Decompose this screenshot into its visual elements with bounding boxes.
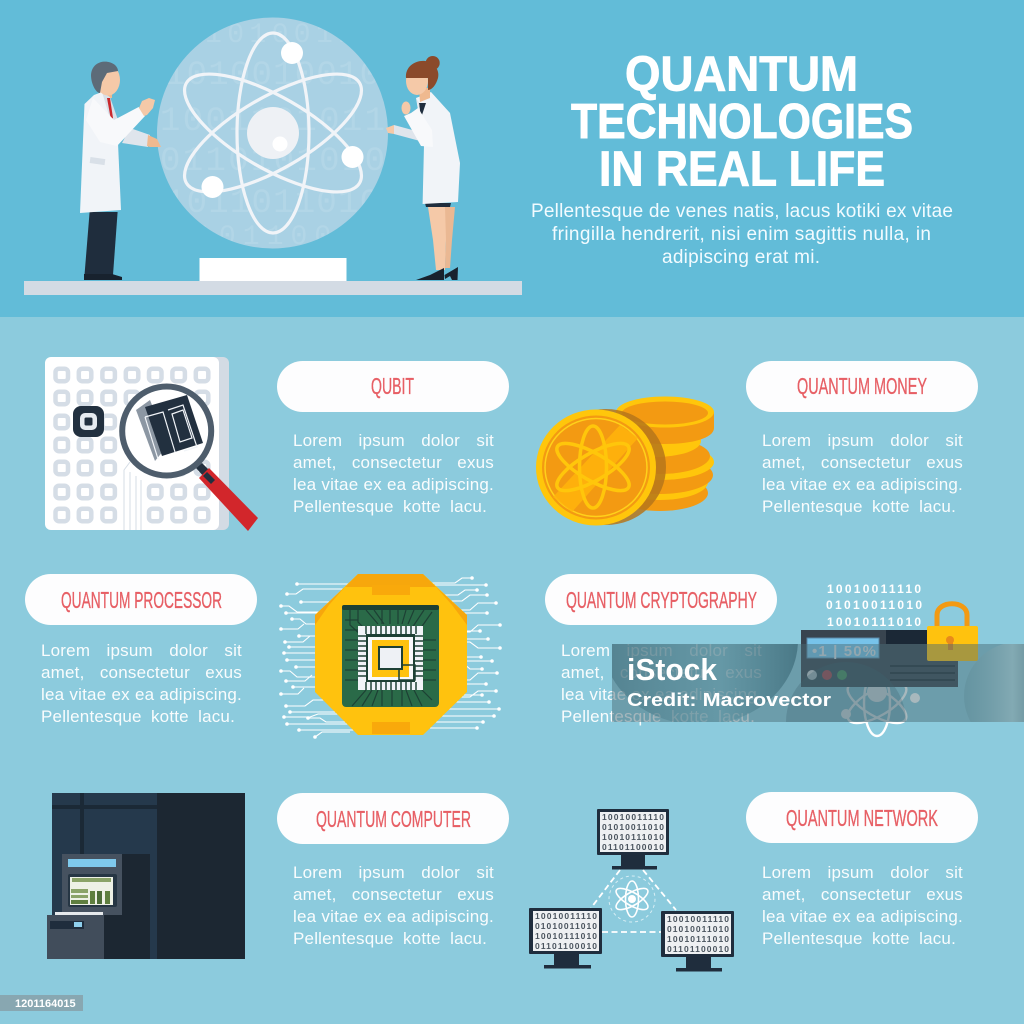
pill: quantum money: QUANTUM MONEY: [797, 373, 927, 399]
icon: quantum cryptography device: 01010011010: [826, 598, 922, 612]
male scientist: [80, 62, 161, 280]
header background: [0, 0, 1024, 317]
female scientist: [386, 56, 460, 280]
quantum sphere with atom: 1010010010: [165, 57, 380, 95]
monitor: left: 01010011010: [535, 921, 597, 931]
monitor: top: 10010011110: [602, 812, 664, 822]
text: qubit: amet, consectetur exus: [293, 453, 494, 472]
icon: qubit chip with magnifier: [45, 357, 258, 531]
text: quantum money: Lorem ipsum dolor sit: [762, 431, 963, 450]
text: quantum network: [762, 863, 963, 948]
icon: quantum computer: [47, 793, 245, 959]
text: quantum cryptography: Lorem ipsum dolor sit: [561, 641, 762, 660]
text: quantum computer: amet, consectetur exus: [293, 885, 494, 904]
text: quantum processor: amet, consectetur exus: [41, 663, 242, 682]
text: quantum cryptography: [561, 641, 762, 726]
monitor: right: 01101100010: [667, 944, 729, 954]
title: IN REAL LIFE: [599, 142, 885, 196]
monitor: left: 01101100010: [535, 941, 597, 951]
title: TECHNOLOGIES: [571, 95, 913, 149]
text: quantum network: Lorem ipsum dolor sit: [762, 863, 963, 882]
icon: quantum network: [529, 809, 734, 972]
title: [571, 48, 913, 196]
quantum sphere with atom: 1001101011: [160, 103, 385, 141]
pill: quantum money: [746, 361, 978, 412]
text: quantum money: Pellentesque kotte lacu.: [762, 497, 956, 516]
text: qubit: [293, 431, 494, 516]
text: quantum cryptography: lea vitae ex ea adipiscing.: [561, 685, 762, 704]
text: quantum money: lea vitae ex ea adipiscing.: [762, 475, 963, 494]
subtitle: Pellentesque de venes natis, lacus kotiki ex vitae: [531, 201, 953, 222]
icon: quantum cryptography device: 10010111010: [827, 615, 921, 629]
text: quantum network: Pellentesque kotte lacu.: [762, 929, 956, 948]
quantum sphere with atom: 1010011: [205, 20, 355, 51]
pill: quantum computer: QUANTUM COMPUTER: [316, 806, 471, 832]
pill: quantum cryptography: [545, 574, 777, 625]
text: quantum computer: [293, 863, 494, 948]
image id tag: [0, 995, 83, 1011]
subtitle: fringilla hendrerit, nisi enim sagittis nulla, in: [552, 224, 931, 245]
icon: quantum processor chip: [281, 574, 500, 737]
text: quantum processor: Lorem ipsum dolor sit: [41, 641, 242, 660]
monitor: left: 10010111010: [535, 931, 597, 941]
pill: quantum processor: QUANTUM PROCESSOR: [61, 587, 222, 613]
text: quantum cryptography: amet, consectetur exus: [561, 663, 762, 682]
monitor: top: 01010011010: [602, 822, 664, 832]
text: qubit: lea vitae ex ea adipiscing.: [293, 475, 494, 494]
monitor: left: 10010011110: [535, 911, 597, 921]
monitor: right: 01010011010: [667, 924, 729, 934]
text: quantum network: lea vitae ex ea adipiscing.: [762, 907, 963, 926]
text: qubit: Lorem ipsum dolor sit: [293, 431, 494, 450]
title: QUANTUM: [625, 48, 858, 102]
icon: quantum cryptography device: •1 | 50%: [812, 643, 876, 660]
quantum sphere with atom: [157, 18, 388, 253]
text: quantum money: amet, consectetur exus: [762, 453, 963, 472]
icon: quantum money coins: [536, 396, 714, 526]
quantum sphere with atom: 1011011010: [165, 185, 380, 223]
pill: qubit: [277, 361, 509, 412]
subtitle: [531, 201, 953, 268]
monitor: right: [661, 911, 734, 972]
icon: quantum cryptography device: 10010011110: [827, 582, 921, 596]
pill: qubit: QUBIT: [371, 373, 414, 399]
pill: quantum network: [746, 792, 978, 843]
text: quantum computer: lea vitae ex ea adipiscing.: [293, 907, 494, 926]
text: qubit: Pellentesque kotte lacu.: [293, 497, 487, 516]
text: quantum processor: lea vitae ex ea adipiscing.: [41, 685, 242, 704]
monitor: top: 01101100010: [602, 842, 664, 852]
monitor: top: [597, 809, 669, 870]
text: quantum money: [762, 431, 963, 516]
image id tag: 1201164015: [15, 998, 76, 1010]
pill: quantum cryptography: QUANTUM CRYPTOGRAPHY: [566, 587, 757, 613]
monitor: left: [529, 908, 602, 968]
watermark credit: Credit: Macrovector: [627, 689, 831, 710]
text: quantum computer: Pellentesque kotte lacu.: [293, 929, 487, 948]
floor platform: [24, 281, 522, 295]
text: quantum computer: Lorem ipsum dolor sit: [293, 863, 494, 882]
text: quantum cryptography: Pellentesque kotte lacu.: [561, 707, 755, 726]
pill: quantum computer: [277, 793, 509, 844]
pill: quantum processor: [25, 574, 257, 625]
subtitle: adipiscing erat mi.: [662, 247, 820, 268]
quantum sphere with atom: 1011000: [195, 222, 355, 253]
monitor: right: 10010111010: [667, 934, 729, 944]
watermark band: [612, 644, 1024, 722]
pill: quantum network: QUANTUM NETWORK: [786, 805, 938, 831]
text: quantum network: amet, consectetur exus: [762, 885, 963, 904]
watermark logo: iStock: [627, 652, 718, 687]
text: quantum processor: [41, 641, 242, 726]
monitor: right: 10010011110: [667, 914, 729, 924]
quantum sphere with atom: 0110101010: [160, 143, 385, 181]
text: quantum processor: Pellentesque kotte lacu.: [41, 707, 235, 726]
pedestal: [200, 258, 346, 281]
icon: quantum cryptography device: [801, 582, 978, 736]
monitor: top: 10010111010: [602, 832, 664, 842]
